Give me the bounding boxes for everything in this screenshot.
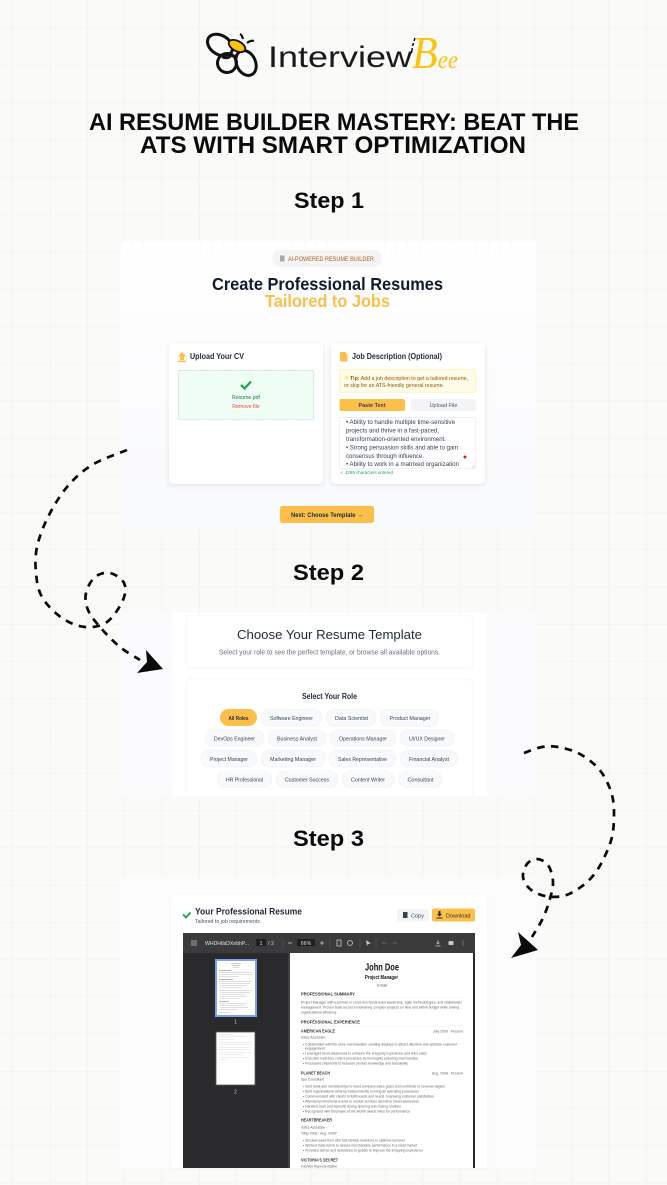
button: upload file bbox=[411, 399, 476, 411]
heading: step 1: Step 1 bbox=[294, 188, 364, 213]
thumbnail: page 2 bbox=[216, 1032, 255, 1085]
resume experience: • Collaborated with the store merchandiser creating displays to attract attention and optimize customer bbox=[303, 1042, 458, 1046]
role chips: Software Engineer bbox=[270, 716, 313, 722]
text area: transformation-oriented environment. bbox=[346, 437, 446, 443]
role chips: Financial Analyst bbox=[409, 757, 449, 763]
card: select your role: Select Your Role bbox=[302, 692, 357, 701]
subheading: Tailored to job requirements bbox=[195, 919, 260, 925]
resume experience: • Leveraged trend awareness to enhance the shopping experience and drive sales bbox=[303, 1050, 427, 1056]
resume header: Project Manager bbox=[365, 975, 399, 981]
button: copy: Copy bbox=[411, 914, 424, 920]
wordmark: Bee bbox=[412, 27, 458, 78]
resume experience: AMERICAN EAGLE bbox=[301, 1028, 335, 1034]
button: next bbox=[280, 506, 374, 523]
button: upload file: Upload File bbox=[430, 403, 457, 409]
text area bbox=[339, 417, 476, 469]
viewer toolbar: WHDHtlsDXebhP... bbox=[205, 941, 249, 947]
resume experience: Spa Consultant bbox=[301, 1076, 325, 1082]
heading: your professional resume: Your Professional Resume bbox=[195, 906, 302, 918]
icon: document bbox=[340, 352, 348, 362]
role chips bbox=[201, 709, 458, 788]
label: page 1: 1 bbox=[234, 1020, 237, 1026]
thumbnail: page 1 bbox=[215, 959, 257, 1017]
text area: • Strong persuasion skills and able to gain bbox=[346, 446, 458, 452]
resume header: John Doe bbox=[365, 962, 399, 974]
resume experience: • Provided advice and assistance to guests to improve the shopping experience bbox=[303, 1148, 424, 1152]
card: choose template header bbox=[186, 615, 473, 669]
button: copy bbox=[397, 909, 429, 922]
resume summary: management. Proven track record in delivering complex projects on time and within budget while driving bbox=[301, 1004, 459, 1010]
resume experience: *May 2008 - Aug. 2008* bbox=[301, 1130, 337, 1136]
resume experience: PROFESSIONAL EXPERIENCE bbox=[301, 1020, 360, 1024]
role chips: Data Scientist bbox=[335, 716, 368, 722]
role chips: Customer Success bbox=[285, 777, 329, 783]
drop zone bbox=[178, 370, 314, 420]
resume experience: engagement bbox=[305, 1046, 326, 1050]
PDF viewer bbox=[183, 933, 475, 1168]
drop zone: Resume.pdf bbox=[232, 395, 261, 401]
resume header: Email bbox=[377, 982, 387, 988]
resume experience: • Stocked sales floor with fast fashion inventory to optimize turnover bbox=[303, 1138, 406, 1142]
resume summary: PROFESSIONAL SUMMARY bbox=[301, 992, 355, 996]
heading: step 3: Step 3 bbox=[293, 826, 364, 851]
wordmark: Interview bbox=[268, 41, 412, 74]
wordmark bbox=[268, 27, 458, 78]
role chips: Product Manager bbox=[390, 716, 431, 722]
resume experience: Aug. 2008 - Present bbox=[432, 1070, 464, 1076]
resume page bbox=[290, 953, 473, 1168]
resume experience: • Sold retail and memberships to meet company sales goals and contribute to revenue targets bbox=[303, 1084, 445, 1088]
viewer toolbar: / 2 bbox=[268, 941, 274, 947]
text area: • Ability to handle multiple time-sensitive bbox=[346, 420, 456, 426]
button: download: Download bbox=[446, 914, 470, 920]
resume experience: HEARTBREAKER bbox=[301, 1118, 332, 1122]
icon: bee bbox=[204, 30, 260, 79]
button: paste text: Paste Text bbox=[358, 403, 386, 409]
role chips: Consultant bbox=[408, 777, 434, 783]
resume experience: Sales Associate bbox=[301, 1124, 326, 1130]
resume experience: VICTORIA'S SECRET bbox=[301, 1158, 338, 1162]
card: select your role bbox=[186, 679, 473, 796]
panel: step 2 screenshot bbox=[120, 613, 536, 796]
resume header bbox=[365, 962, 399, 988]
role chips: Marketing Manager bbox=[270, 757, 316, 763]
text area: consensus through influence. bbox=[346, 454, 424, 460]
icon: green check bbox=[183, 912, 190, 918]
role chips: HR Professional bbox=[226, 777, 263, 783]
badge: AI-powered: AI-POWERED RESUME BUILDER bbox=[288, 257, 375, 263]
hero heading: Tailored to Jobs bbox=[265, 291, 390, 311]
icon: upload bbox=[178, 352, 186, 362]
role chips: All Roles bbox=[228, 716, 248, 722]
tip box: Tip: Add a job description to get a tailored resume, bbox=[350, 376, 468, 382]
drop zone: Remove file bbox=[232, 404, 260, 410]
text area: • Ability to work in a matrixed organization bbox=[346, 462, 459, 468]
resume experience: Fashion Representative bbox=[301, 1163, 338, 1168]
resume experience: • Executed inventory control processes by thoroughly scanning merchandise bbox=[303, 1056, 419, 1060]
label: page 2: 2 bbox=[234, 1090, 237, 1096]
resume summary: Project Manager with expertise in cross-functional team leadership, agile methodologies, and stakeholder bbox=[301, 1000, 463, 1004]
role chips: Business Analyst bbox=[277, 736, 317, 742]
role chips: UI/UX Designer bbox=[409, 736, 445, 742]
resume experience bbox=[301, 1020, 464, 1168]
resume experience: • Handled cash and deposits during opening and closing routines bbox=[303, 1104, 401, 1108]
tip box: or skip for an ATS-friendly general resume. bbox=[344, 383, 444, 389]
arrow: step 1 to step 2 bbox=[35, 450, 163, 673]
role chips: Content Writer bbox=[351, 777, 385, 783]
hero heading bbox=[212, 274, 443, 311]
hero heading: Create Professional Resumes bbox=[212, 274, 443, 294]
resume experience: July 2009 - Present bbox=[433, 1028, 464, 1034]
card: choose template header: Select your role to see the perfect template, or browse all available options. bbox=[219, 650, 440, 656]
panel: step 3 screenshot bbox=[120, 878, 536, 1168]
panel: step 1 screenshot bbox=[120, 240, 536, 530]
heading: upload your CV: Upload Your CV bbox=[190, 352, 245, 361]
panel: upload CV card bbox=[169, 343, 323, 484]
title bbox=[89, 109, 579, 159]
resume summary bbox=[301, 992, 463, 1014]
resume experience: • Recognized with Employee of the Month award twice for performance bbox=[303, 1108, 411, 1114]
tip box bbox=[339, 369, 476, 393]
arrow: step 2 to step 3 bbox=[511, 746, 614, 958]
card: choose template header: Choose Your Resume Template bbox=[237, 627, 422, 642]
title: ATS WITH SMART OPTIMIZATION bbox=[140, 132, 526, 159]
button: next: Next: Choose Template → bbox=[291, 512, 363, 519]
viewer toolbar bbox=[183, 933, 475, 953]
character count: ✓ 4289 characters entered bbox=[340, 470, 393, 475]
title: AI RESUME BUILDER MASTERY: BEAT THE bbox=[89, 109, 579, 136]
resume experience: PLANET BEACH bbox=[301, 1070, 330, 1076]
button: download bbox=[432, 908, 475, 922]
panel: job description card bbox=[331, 343, 485, 484]
button: paste text bbox=[340, 399, 405, 411]
role chips: Project Manager bbox=[210, 757, 248, 763]
resume experience: • Worked trade terms to assess merchandise performance in a retail market bbox=[303, 1142, 418, 1148]
heading: step 2: Step 2 bbox=[293, 560, 364, 585]
viewer toolbar: 66% bbox=[301, 941, 312, 947]
logo: InterviewBee bbox=[204, 27, 458, 79]
role chips: Operations Manager bbox=[339, 736, 387, 742]
resume experience: • Built organizational skills by independently running all operating procedures bbox=[303, 1088, 419, 1094]
resume experience: • Processed shipments to increase product knowledge and traceability bbox=[303, 1060, 408, 1066]
heading: job description: Job Description (Optional) bbox=[352, 352, 442, 361]
resume experience: • Communicated with clients to fulfill wants and needs, improving customer satisfaction bbox=[303, 1094, 434, 1098]
resume summary: organizational efficiency. bbox=[301, 1010, 337, 1014]
viewer toolbar: 1 bbox=[259, 941, 263, 947]
role chips: DevOps Engineer bbox=[214, 736, 255, 742]
resume experience: Sales Associate bbox=[301, 1034, 326, 1040]
badge: AI-powered bbox=[272, 250, 382, 267]
text area: projects and thrive in a fast-paced, bbox=[346, 428, 439, 434]
role chips: Sales Representative bbox=[338, 757, 387, 763]
resume experience: • Attended promotional events to market services and drive brand awareness bbox=[303, 1098, 419, 1104]
